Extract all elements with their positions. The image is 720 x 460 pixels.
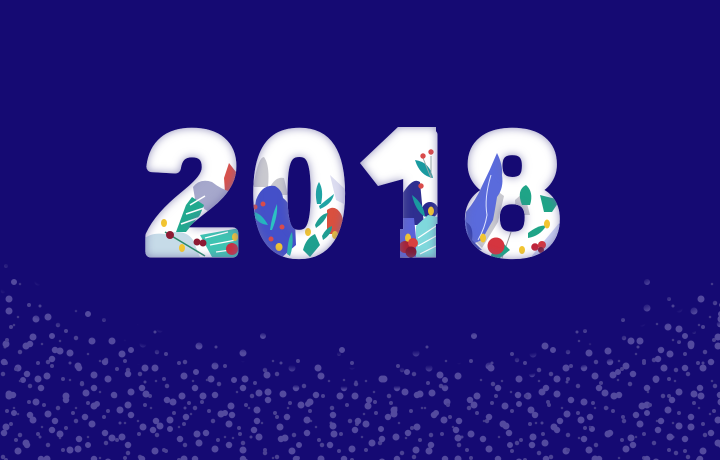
flowers in digit 8 <box>464 153 560 258</box>
floral artwork inside numerals <box>143 149 560 259</box>
year 2018 numerals: 2018 <box>145 99 560 289</box>
flowers in digit 1 <box>399 149 438 258</box>
flowers in digit 0 <box>252 157 346 259</box>
inner shadow on numerals <box>145 99 560 289</box>
flowers in digit 2 <box>143 163 240 257</box>
snow field <box>0 262 720 460</box>
year 2018 numerals <box>145 127 560 260</box>
